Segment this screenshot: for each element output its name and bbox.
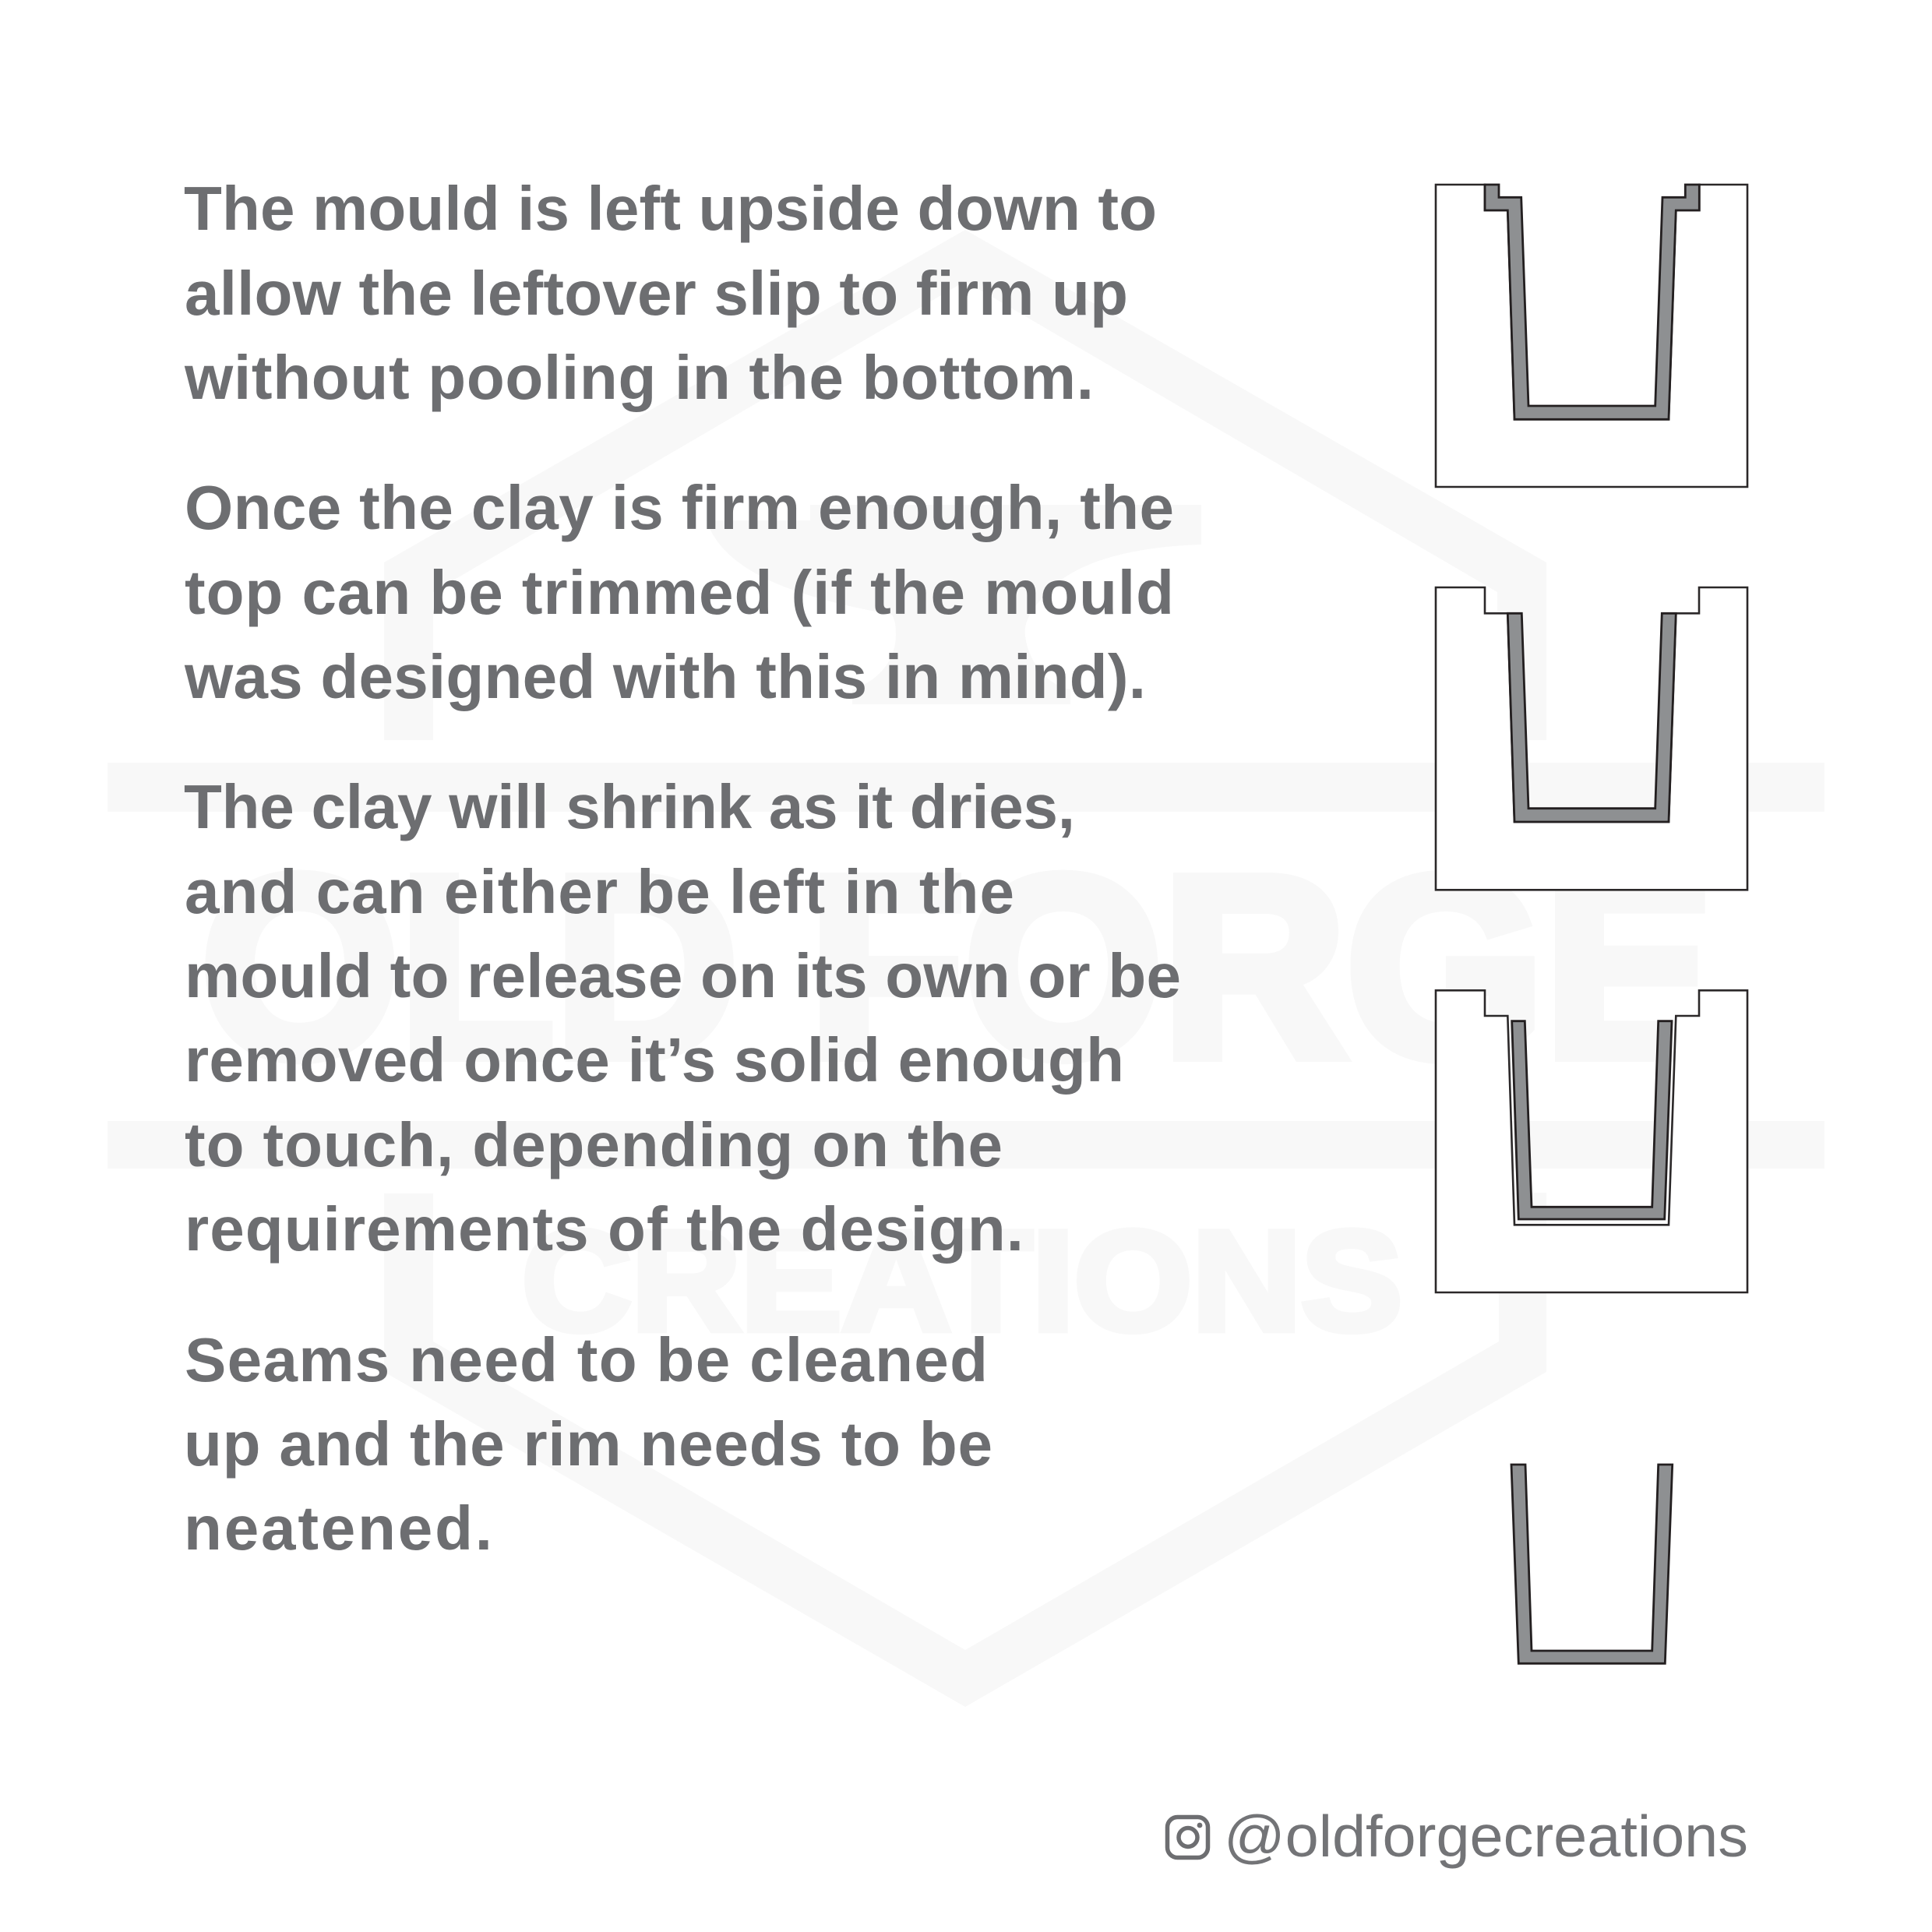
text block: paragraph 3: The clay will shrink as it dries,	[184, 772, 1075, 841]
text block: paragraph 1: allow the leftover slip to firm up	[185, 259, 1128, 328]
diagram 2: top trimmed	[1436, 587, 1747, 890]
social handle: @oldforgecreations	[1224, 1803, 1748, 1869]
icon: instagram	[1167, 1817, 1208, 1857]
text block: paragraph 3: to touch, depending on the	[185, 1110, 1003, 1179]
text block: paragraph 2: was designed with this in mind).	[184, 642, 1146, 711]
watermark: Old Forge Creations logo: CREATIONS	[522, 1201, 1402, 1360]
text block: paragraph 4: neatened.	[184, 1493, 492, 1563]
diagram 3: clay shrunk away from mould	[1436, 990, 1747, 1292]
text block: paragraph 3: removed once it’s solid enough	[185, 1025, 1124, 1095]
diagram 4: released clay form	[1511, 1465, 1673, 1663]
text block: paragraph 3: and can either be left in the	[185, 857, 1014, 926]
diagram 1: mould upside down with leftover slip on rim	[1436, 185, 1747, 487]
text block: paragraph 4: up and the rim needs to be	[184, 1409, 992, 1479]
watermark: Old Forge Creations logo: OLD FORGE	[201, 823, 1714, 1110]
text block: paragraph 2	[184, 473, 1174, 711]
text block: paragraph 2: Once the clay is firm enough, the	[185, 473, 1174, 542]
text block: paragraph 1: without pooling in the bottom.	[184, 343, 1094, 412]
text block: paragraph 1: The mould is left upside down to	[184, 174, 1157, 243]
text block: paragraph 3	[184, 772, 1181, 1264]
text block: paragraph 3: mould to release on its own or be	[185, 941, 1181, 1010]
text block: paragraph 4: Seams need to be cleaned	[185, 1325, 988, 1394]
watermark: Old Forge Creations logo	[108, 230, 1824, 1707]
text block: paragraph 3: requirements of the design.	[185, 1194, 1024, 1264]
text block: paragraph 1	[184, 174, 1157, 412]
text block: paragraph 2: top can be trimmed (if the mould	[185, 558, 1174, 627]
text block: paragraph 4	[184, 1325, 992, 1563]
